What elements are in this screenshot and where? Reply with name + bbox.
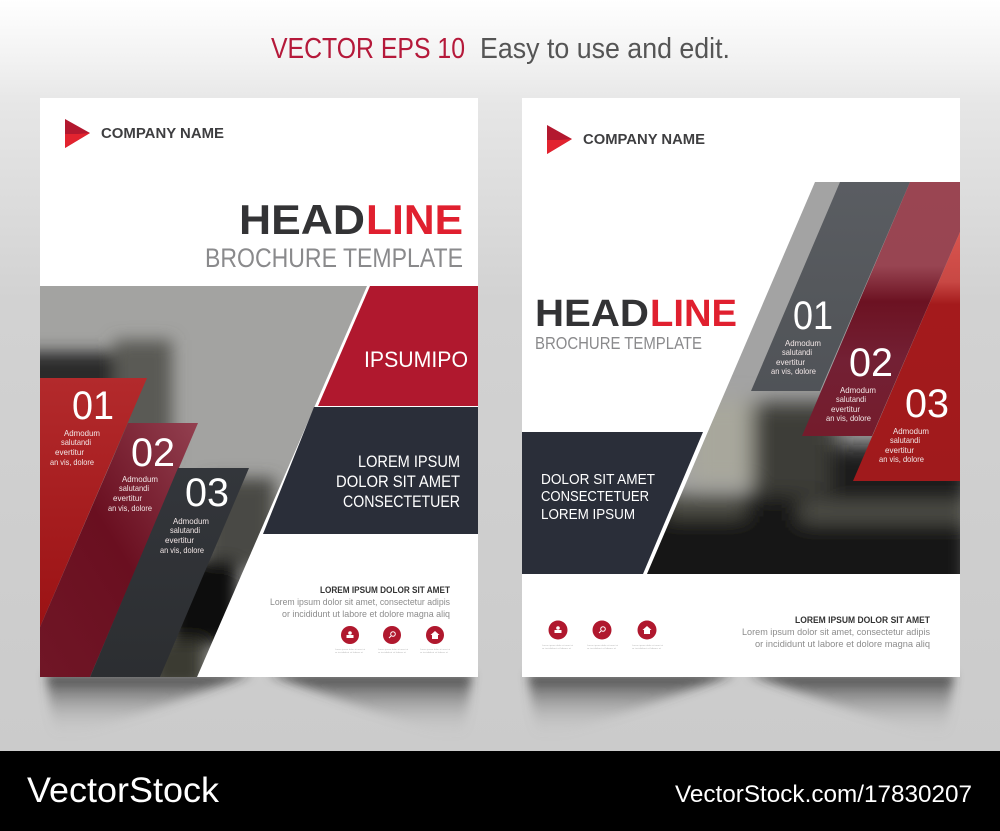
left company name: COMPANY NAME [101,126,224,142]
right number strip 01: salutandi [782,347,812,357]
right company name: COMPANY NAME [583,132,705,148]
right footer text: Lorem ipsum dolor sit amet, consectetur adipis [742,627,930,638]
panel: right brochure [522,98,970,677]
left headline: LINE [366,196,463,243]
right footer icons: Lorem ipsum dolor sit amet ut [542,644,574,647]
left footer icons: Lorem ipsum dolor sit amet ut [420,648,451,651]
right number strip 02: salutandi [836,394,866,404]
right number strip 02: an vis, dolore [826,413,871,423]
right dark block [522,432,703,574]
left number strip 01: evertitur [55,447,84,457]
right footer icons: or incididunt ut labore et [632,647,662,650]
right number strip 03: an vis, dolore [879,454,924,464]
right number strip 03: 03 [905,382,949,426]
right number strip 03: salutandi [890,435,920,445]
left number strip 01: Admodum [64,428,100,438]
right dark block: LOREM IPSUM [541,506,635,523]
right footer text: LOREM IPSUM DOLOR SIT AMET [795,615,930,625]
right footer text: or incididunt ut labore et dolore magna aliq [755,639,930,650]
right dark block: CONSECTETUER [541,488,649,505]
left footer icons: or incididunt ut labore et [378,651,407,654]
right number strip 01 [751,182,910,391]
left number strip 02 [40,423,198,677]
left footer icons: or incididunt ut labore et [420,651,449,654]
right number strip 02: 02 [849,341,893,385]
left photo [20,286,370,690]
right subheading: BROCHURE TEMPLATE [535,333,702,353]
left number strip 02: an vis, dolore [108,503,152,513]
left number strip 01: an vis, dolore [50,457,94,467]
right number strip 02 [802,182,960,436]
left footer text: Lorem ipsum dolor sit amet, consectetur adipis [270,597,450,608]
left number strip 02: Admodum [122,474,158,484]
left red block: IPSUMIPO [364,347,468,372]
right photo [647,182,960,574]
right footer text [742,615,930,650]
left number strip 01 [40,378,147,627]
footer bar [0,751,1000,831]
title: VECTOR EPS 10 [271,33,465,65]
right footer icons: or incididunt ut labore et [542,647,572,650]
title [271,33,730,65]
right footer icons: or incididunt ut labore et [587,647,617,650]
right number strip 01: Admodum [785,338,821,348]
left footer icons: Lorem ipsum dolor sit amet ut [335,648,366,651]
right footer icons: Lorem ipsum dolor sit amet ut [632,644,664,647]
left subheading: BROCHURE TEMPLATE [205,243,463,273]
right headline [535,293,737,335]
left footer icons [335,626,451,654]
left number strip 03: an vis, dolore [160,545,204,555]
left footer text: or incididunt ut labore et dolore magna aliq [282,609,450,620]
right number strip 02: evertitur [831,404,860,414]
left dark block: CONSECTETUER [343,493,460,511]
icon: left logo triangle [65,119,90,148]
right footer icons [542,620,664,650]
right number strip 01: 01 [793,294,833,338]
left number strip 03 [90,468,249,677]
right number strip 03: Admodum [893,426,929,436]
left number strip 03: evertitur [165,535,194,545]
left number strip 02: salutandi [119,483,149,493]
left dark block: DOLOR SIT AMET [336,473,460,491]
left footer icons: or incididunt ut labore et [335,651,364,654]
left headline [239,196,463,243]
left dark block: LOREM IPSUM [358,453,460,471]
left red block [318,286,478,406]
left headline: HEAD [239,196,365,243]
left footer text [270,585,450,620]
right number strip 02: Admodum [840,385,876,395]
page shadows [46,674,954,735]
right number strip 03: evertitur [885,445,914,455]
right footer icons: Lorem ipsum dolor sit amet ut [587,644,619,647]
panel: left brochure [20,98,478,690]
left footer icons: Lorem ipsum dolor sit amet ut [378,648,409,651]
right number strip 01: an vis, dolore [771,366,816,376]
title: Easy to use and edit. [480,33,730,65]
footer url: VectorStock.com/17830207 [675,781,972,808]
right dark block: DOLOR SIT AMET [541,471,655,488]
left dark block [263,407,478,534]
left number strip 02: evertitur [113,493,142,503]
left footer text: LOREM IPSUM DOLOR SIT AMET [320,585,450,595]
footer brand: VectorStock [27,771,220,810]
right number strip 03 [853,232,960,481]
left number strip 03: 03 [185,471,229,515]
right headline: HEAD [535,293,649,335]
left number strip 03: Admodum [173,516,209,526]
left number strip 01: 01 [72,384,114,428]
right headline: LINE [650,293,737,335]
right number strip 01: evertitur [776,357,805,367]
left number strip 03: salutandi [170,525,200,535]
left number strip 02: 02 [131,431,175,475]
left number strip 01: salutandi [61,437,91,447]
icon: right logo triangle [547,125,572,154]
